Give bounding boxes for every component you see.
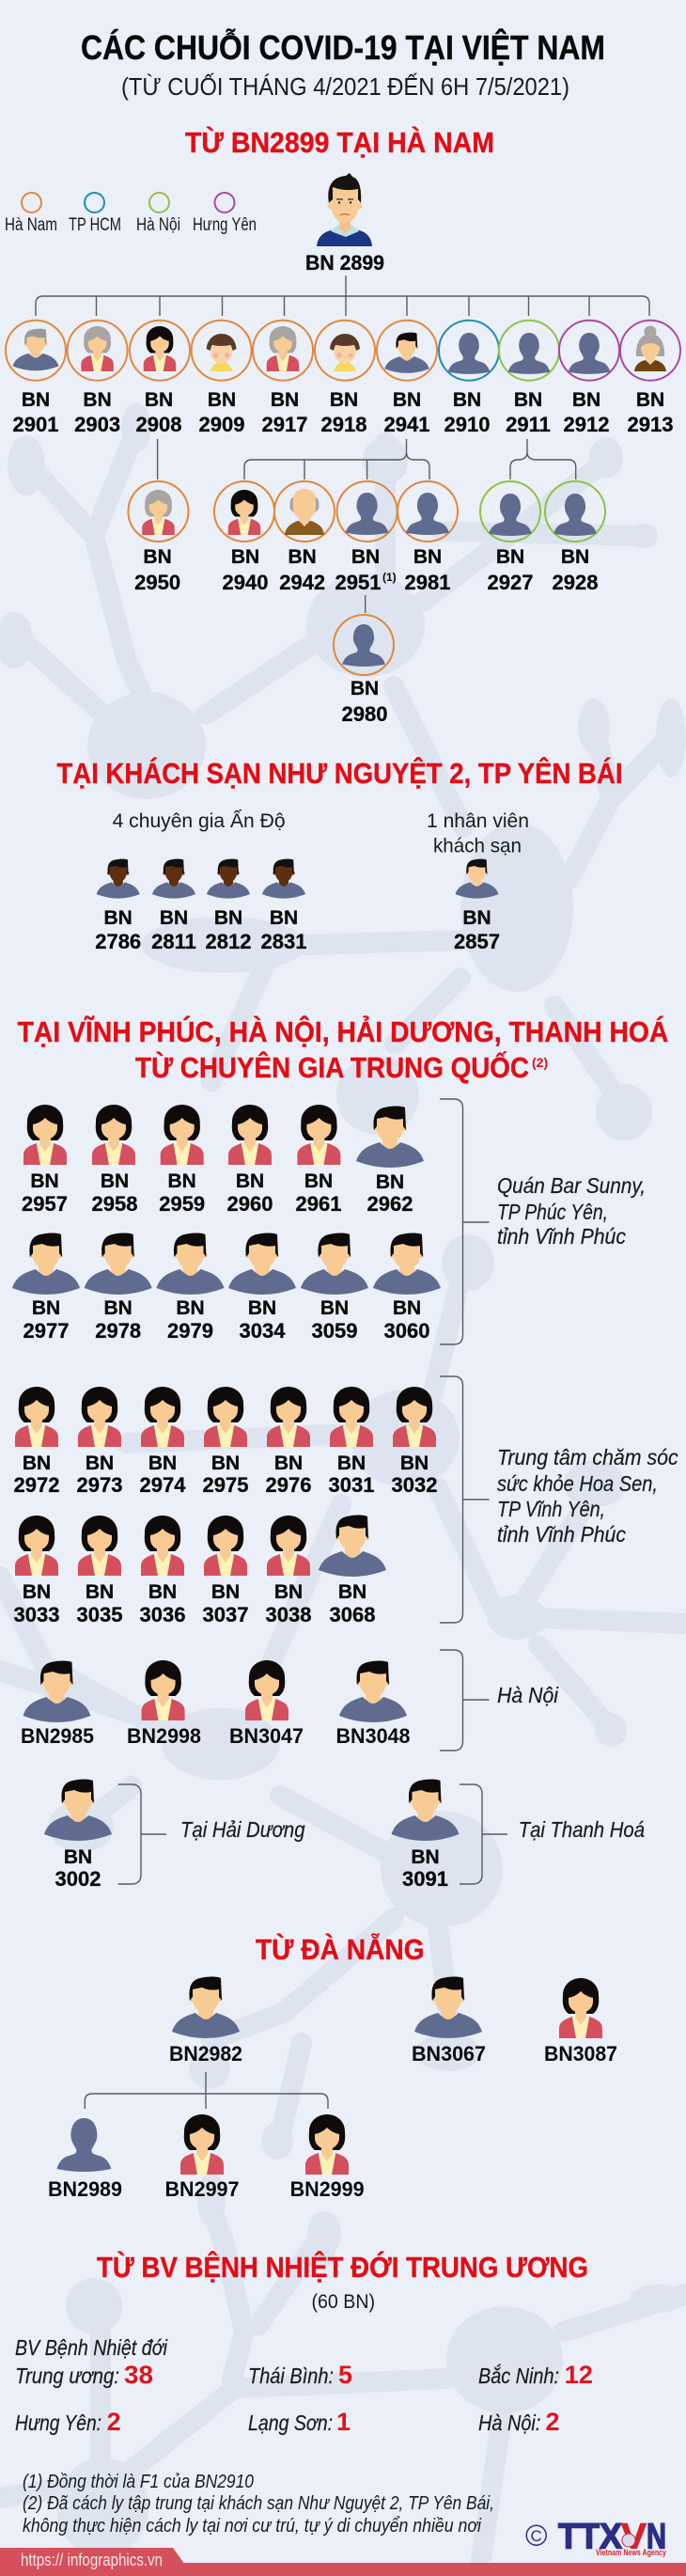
- person: BN2982: BN2982: [169, 2042, 242, 2066]
- person: BN 2941: [377, 321, 437, 436]
- person: BN 3002: BN: [64, 1846, 92, 1868]
- stat: Hung Yen 2: 2: [107, 2408, 121, 2436]
- stat: Bac Ninh 12: 12: [565, 2361, 593, 2389]
- person: BN2989: [48, 2118, 122, 2201]
- person: BN3087: [544, 1978, 617, 2066]
- panel: chain from BN2899 in Ha Nam: [5, 125, 680, 726]
- person: BN2985: BN2985: [21, 1724, 94, 1748]
- person: BN 2957: 2957: [22, 1192, 68, 1216]
- person: BN 2958: [92, 1105, 137, 1216]
- heading: hospital: TỪ BV BỆNH NHIỆT ĐỚI TRUNG ƯƠNG: [97, 2250, 588, 2284]
- person: BN 2951: [335, 481, 398, 594]
- bracket: Sunny bar: [440, 1099, 489, 1344]
- person: BN 2950: BN: [143, 546, 172, 568]
- person: BN 2978: [85, 1233, 152, 1343]
- person: BN 3002: [44, 1779, 112, 1891]
- person: BN 3035: [77, 1516, 122, 1626]
- subtitle: (TỪ CUỐI THÁNG 4/2021 ĐẾN 6H 7/5/2021): [121, 72, 569, 101]
- person: BN 3033: 3033: [14, 1603, 59, 1626]
- person: BN 2918: 2918: [321, 413, 366, 436]
- person: BN 2786: BN: [104, 907, 133, 929]
- person: BN 2901: [6, 321, 66, 436]
- person: BN 2976: [266, 1387, 311, 1497]
- person: BN3047: [229, 1660, 304, 1748]
- person: BN 2910: BN: [453, 389, 481, 411]
- person: BN 2978: BN: [104, 1297, 133, 1319]
- person: BN3067: [412, 1976, 486, 2066]
- person: BN 2927: [480, 481, 540, 594]
- person: BN 3035: 3035: [77, 1603, 122, 1626]
- person: BN 2961: [296, 1105, 341, 1216]
- person: BN 3068: [319, 1516, 386, 1626]
- person: BN 3031: [329, 1387, 374, 1497]
- person: BN 2910: 2910: [444, 413, 490, 436]
- person: BN 2977: BN: [32, 1297, 60, 1319]
- person: BN3047: BN3047: [229, 1724, 304, 1748]
- person: BN 2928: [545, 481, 605, 594]
- person: BN 2975: 2975: [203, 1473, 248, 1497]
- person: BN 3038: 3038: [266, 1603, 311, 1626]
- person: BN 2811: BN: [160, 907, 188, 929]
- stat: Hung Yen 2: Hưng Yên:: [15, 2411, 101, 2435]
- stat: Bac Ninh 12: Bắc Ninh:: [478, 2364, 559, 2388]
- person: BN 2901: BN: [22, 389, 50, 411]
- person: BN2997: [165, 2114, 239, 2201]
- heading: Vinh Phuc, Ha Noi, Hai Duong, Thanh Hoa: (2): [532, 1055, 548, 1070]
- caption: Ha Noi: Hà Nội: [497, 1683, 559, 1707]
- person: BN 2812: 2812: [206, 930, 251, 953]
- footnotes: không thực hiện cách ly tại nơi cư trú, tự ý di chuyển nhiều nơi: [23, 2516, 481, 2537]
- person: BN 2811: [151, 859, 196, 953]
- person: BN 2857: BN: [462, 907, 491, 929]
- person: BN 3059: BN: [320, 1297, 349, 1319]
- person: BN 2831: BN: [270, 907, 298, 929]
- person: BN 2957: BN: [30, 1170, 59, 1192]
- tree connector level 1: [36, 275, 649, 316]
- person: BN 2942: BN: [288, 546, 317, 568]
- logo: TTXVN: C: [531, 2527, 542, 2545]
- legend: Hà Nam: [5, 215, 57, 235]
- panel: from Chinese experts: [12, 1014, 678, 1891]
- legend: TP HCM: [69, 215, 121, 235]
- caption: Hoa Sen healthcare center: tỉnh Vĩnh Phúc: [497, 1522, 626, 1547]
- person: BN 2909: [192, 321, 252, 436]
- person: BN 2974: [140, 1387, 186, 1497]
- person: BN 2812: [206, 859, 251, 953]
- person: BN 2974: BN: [148, 1453, 177, 1474]
- person: BN 3034: 3034: [240, 1319, 286, 1343]
- person: BN 2975: BN: [211, 1453, 240, 1474]
- person: BN 2918: BN: [330, 389, 358, 411]
- person: BN2985: [21, 1660, 94, 1748]
- person: BN 2960: [227, 1105, 273, 1216]
- person: BN 2941: 2941: [384, 413, 429, 436]
- person: BN 3031: BN: [337, 1453, 366, 1474]
- person: BN 2831: [261, 859, 306, 953]
- person: BN 3068: 3068: [330, 1603, 375, 1626]
- person: BN 2903: BN: [83, 389, 112, 411]
- caption: Sunny bar: [497, 1173, 646, 1249]
- caption: 1 hotel employee: [427, 810, 529, 857]
- logo: TTXVN: TTX: [558, 2518, 623, 2557]
- stat: hospital 38: BV Bệnh Nhiệt đới: [15, 2335, 168, 2360]
- person: BN 2977: 2977: [23, 1319, 69, 1343]
- subheading: 60 patients: (60 BN): [312, 2291, 375, 2313]
- person: BN 3038: [266, 1516, 311, 1626]
- footnotes: (2) Đã cách ly tập trung tại khách sạn Như Nguyệt 2, TP Yên Bái,: [23, 2493, 494, 2514]
- person: BN 2979: 2979: [167, 1319, 213, 1343]
- bracket: Hoa Sen: [440, 1376, 489, 1623]
- person: BN 3038: BN: [274, 1581, 303, 1603]
- person: BN 2912: [559, 321, 619, 436]
- caption: Hoa Sen healthcare center: [497, 1445, 678, 1547]
- stat: Ha Noi 2: Hà Nội:: [478, 2411, 540, 2435]
- person: BN3048: [336, 1660, 410, 1748]
- caption: Thanh Hoa: Tại Thanh Hoá: [519, 1817, 645, 1842]
- person: BN 3036: BN: [148, 1581, 177, 1603]
- person: BN 2959: BN: [168, 1170, 196, 1192]
- person: BN 2928: 2928: [553, 571, 598, 594]
- person: BN 2911: BN: [514, 389, 542, 411]
- bracket: Thanh Hoa: [460, 1784, 507, 1884]
- person: BN2999: [290, 2114, 365, 2201]
- caption: Sunny bar: Quán Bar Sunny,: [497, 1173, 646, 1198]
- person: BN 2976: 2976: [266, 1473, 311, 1497]
- legend: Hà Nội: [136, 215, 180, 235]
- person: BN 2909: BN: [208, 389, 236, 411]
- person: BN 3032: [392, 1387, 437, 1497]
- person: BN 3060: BN: [393, 1297, 421, 1319]
- person: BN 2908: BN: [145, 389, 173, 411]
- person: BN 3032: BN: [400, 1453, 429, 1474]
- stat: hospital 38: [15, 2335, 168, 2389]
- person: BN3087: BN3087: [544, 2042, 617, 2066]
- person: BN 2912: BN: [572, 389, 600, 411]
- person: BN 2911: [499, 321, 559, 436]
- logo: TTXVN: N: [647, 2518, 666, 2557]
- legend: [5, 193, 257, 235]
- person: BN 2917: 2917: [262, 413, 307, 436]
- person: BN 2942: 2942: [279, 571, 325, 594]
- footer band: [0, 2548, 686, 2576]
- person: BN 2959: [159, 1105, 205, 1216]
- person: BN 3059: 3059: [312, 1319, 357, 1343]
- person: BN 3031: 3031: [329, 1473, 374, 1497]
- person: BN 3037: BN: [211, 1581, 240, 1603]
- person: BN 2913: [620, 321, 680, 436]
- caption: 4 Indian experts: 4 chuyên gia Ấn Độ: [113, 810, 286, 832]
- person: BN 2908: [130, 321, 190, 436]
- person: BN 2909: 2909: [199, 413, 244, 436]
- person: BN 2903: 2903: [74, 413, 120, 436]
- person: BN 2903: [68, 321, 128, 436]
- person: BN 2913: 2913: [628, 413, 673, 436]
- person: BN 2940: BN: [231, 546, 259, 568]
- person: BN 3068: BN: [338, 1581, 366, 1603]
- heading: Vinh Phuc, Ha Noi, Hai Duong, Thanh Hoa: [18, 1014, 668, 1084]
- person: BN 3060: [373, 1233, 441, 1343]
- person: BN 2857: [454, 859, 500, 953]
- heading: hotel: TẠI KHÁCH SẠN NHƯ NGUYỆT 2, TP YÊN BÁI: [56, 756, 622, 790]
- person: BN 2976: BN: [274, 1453, 303, 1474]
- person: BN3048: BN3048: [336, 1724, 410, 1748]
- person: BN 3091: BN: [411, 1846, 440, 1868]
- person: BN 3033: [14, 1516, 59, 1626]
- person: BN 2918: [315, 321, 375, 436]
- tree connector level 2: [158, 439, 576, 613]
- stat: Lang Son 1: 1: [336, 2408, 351, 2436]
- person: BN2998: BN2998: [127, 1724, 201, 1748]
- person: BN 2972: [14, 1387, 59, 1497]
- person: BN 2962: BN: [376, 1171, 404, 1193]
- person: BN 2951: BN: [351, 546, 380, 568]
- person: BN 2978: 2978: [95, 1319, 141, 1343]
- person: BN 2928: BN: [561, 546, 589, 568]
- title: CÁC CHUỖI COVID-19 TẠI VIỆT NAM: [81, 27, 605, 67]
- label BN 2899: BN 2899: [305, 251, 384, 275]
- footnotes: [23, 2472, 494, 2537]
- person: BN 3034: BN: [248, 1297, 276, 1319]
- person: BN 2786: [95, 859, 141, 953]
- person: BN 2980: BN: [351, 678, 379, 699]
- person: BN 2899 root patient: [317, 173, 372, 246]
- panel: Nhu Nguyet 2 hotel, Yen Bai: [56, 756, 622, 953]
- person: BN 2901: 2901: [13, 413, 58, 436]
- caption: Hoa Sen healthcare center: sức khỏe Hoa Sen,: [497, 1471, 658, 1496]
- person: BN 3037: [203, 1516, 248, 1626]
- caption: Hoa Sen healthcare center: TP Vĩnh Yên,: [497, 1497, 605, 1521]
- person: BN 3060: 3060: [384, 1319, 429, 1343]
- person: BN 3002: 3002: [55, 1867, 101, 1891]
- person: BN 3032: 3032: [392, 1473, 437, 1497]
- person: BN 2973: [77, 1387, 122, 1497]
- person: BN 2960: 2960: [227, 1192, 273, 1216]
- person: BN 2972: 2972: [14, 1473, 59, 1497]
- person: BN 2786: 2786: [95, 930, 141, 953]
- person: BN 2950: 2950: [134, 571, 180, 594]
- person: BN 2975: [203, 1387, 248, 1497]
- person: BN 2961: 2961: [296, 1192, 341, 1216]
- person: BN3067: BN3067: [412, 2042, 486, 2066]
- person: BN 2927: 2927: [488, 571, 533, 594]
- person: BN2998: [127, 1660, 201, 1748]
- person: BN 3033: BN: [23, 1581, 51, 1603]
- person: BN 3037: 3037: [203, 1603, 248, 1626]
- person: BN 2941: BN: [393, 389, 421, 411]
- caption: Hai Duong: Tại Hải Dương: [180, 1817, 305, 1842]
- person: BN 2951: 2951: [335, 571, 381, 594]
- stat: hospital 38: 38: [124, 2361, 153, 2389]
- person: BN 2940: [214, 481, 274, 594]
- bracket: Ha Noi: [440, 1650, 489, 1751]
- person: BN 2910: [439, 321, 499, 436]
- footnotes: (1) Đồng thời là F1 của BN2910: [23, 2472, 254, 2492]
- caption: Sunny bar: TP Phúc Yên,: [497, 1200, 608, 1224]
- person: BN 2977: [12, 1233, 80, 1343]
- stat: Thai Binh 5: Thái Bình:: [248, 2364, 334, 2388]
- person: BN2989: BN2989: [48, 2177, 122, 2201]
- person: BN 2811: 2811: [151, 930, 196, 953]
- person: BN 3059: [301, 1233, 368, 1343]
- person: BN 2927: BN: [496, 546, 524, 568]
- person: BN 2979: BN: [176, 1297, 205, 1319]
- person: BN 3036: [140, 1516, 185, 1626]
- person: BN 2973: 2973: [77, 1473, 122, 1497]
- person: BN 2812: BN: [214, 907, 242, 929]
- footer url: https:// infographics.vn: [21, 2551, 163, 2569]
- person: BN 2973: BN: [86, 1453, 114, 1474]
- person: BN 2940: 2940: [223, 571, 268, 594]
- person: BN 3036: 3036: [140, 1603, 185, 1626]
- person: BN 2913: BN: [636, 389, 664, 411]
- person: BN 2961: BN: [304, 1170, 333, 1192]
- logo: TTXVN: [526, 2518, 667, 2558]
- person: BN 2962: 2962: [367, 1192, 413, 1216]
- person: BN2982: [169, 1976, 242, 2066]
- stat: Ha Noi 2: 2: [545, 2408, 560, 2436]
- logo: TTXVN: V: [621, 2518, 647, 2557]
- person: BN 2974: 2974: [140, 1473, 186, 1497]
- person: BN 2957: [22, 1105, 68, 1216]
- person: BN 2917: BN: [271, 389, 299, 411]
- person: BN 3091: 3091: [402, 1867, 448, 1891]
- person: BN 2942: [274, 481, 335, 594]
- person: BN 2981: 2981: [405, 571, 450, 594]
- person: BN 2950: [128, 481, 188, 594]
- legend: Hưng Yên: [193, 215, 257, 235]
- person: BN 2908: 2908: [136, 413, 181, 436]
- caption: Sunny bar: tỉnh Vĩnh Phúc: [497, 1224, 626, 1249]
- panel: from Da Nang: [48, 1932, 617, 2201]
- person: BN 2981: [398, 481, 458, 594]
- person: BN 2958: BN: [101, 1170, 129, 1192]
- person: BN 2981: BN: [413, 546, 442, 568]
- person: BN2999: BN2999: [290, 2177, 365, 2201]
- person: BN 2959: 2959: [159, 1192, 205, 1216]
- stat: Thai Binh 5: 5: [338, 2361, 352, 2389]
- person: BN 2972: BN: [23, 1453, 51, 1474]
- person: BN 2911: 2911: [506, 413, 551, 436]
- person: BN 2980: [334, 615, 394, 726]
- heading: Da Nang: TỪ ĐÀ NẴNG: [256, 1932, 425, 1966]
- person: BN 2831: 2831: [261, 930, 306, 953]
- person: BN 2857: 2857: [454, 930, 500, 953]
- person: BN 3091: [391, 1779, 459, 1891]
- caption: 1 hotel employee: khách sạn: [433, 836, 522, 857]
- person: BN 2980: 2980: [342, 702, 387, 726]
- heading: from BN2899: TỪ BN2899 TẠI HÀ NAM: [185, 125, 494, 159]
- person: BN 2912: 2912: [564, 413, 609, 436]
- person: BN 3034: [228, 1233, 296, 1343]
- person: BN 2960: BN: [236, 1170, 264, 1192]
- person: BN 2979: [156, 1233, 224, 1343]
- stat: hospital 38: Trung ương:: [15, 2364, 119, 2388]
- tree connector: [85, 2072, 328, 2109]
- person: BN 3035: BN: [86, 1581, 114, 1603]
- person: BN2997: BN2997: [165, 2177, 239, 2201]
- person: BN 2917: [253, 321, 313, 436]
- person: BN 2951: (1): [382, 571, 397, 584]
- person: BN 2962: [356, 1106, 424, 1216]
- stat: Lang Son 1: Lạng Sơn:: [248, 2411, 333, 2435]
- panel: from National Hospital for Tropical Diseases: [15, 2250, 593, 2537]
- bracket: Hai Duong: [118, 1784, 166, 1884]
- person: BN 2958: 2958: [92, 1192, 137, 1216]
- caption: 1 hotel employee: 1 nhân viên: [427, 810, 529, 832]
- heading: Vinh Phuc, Ha Noi, Hai Duong, Thanh Hoa: TỪ CHUYÊN GIA TRUNG QUỐC: [135, 1050, 529, 1084]
